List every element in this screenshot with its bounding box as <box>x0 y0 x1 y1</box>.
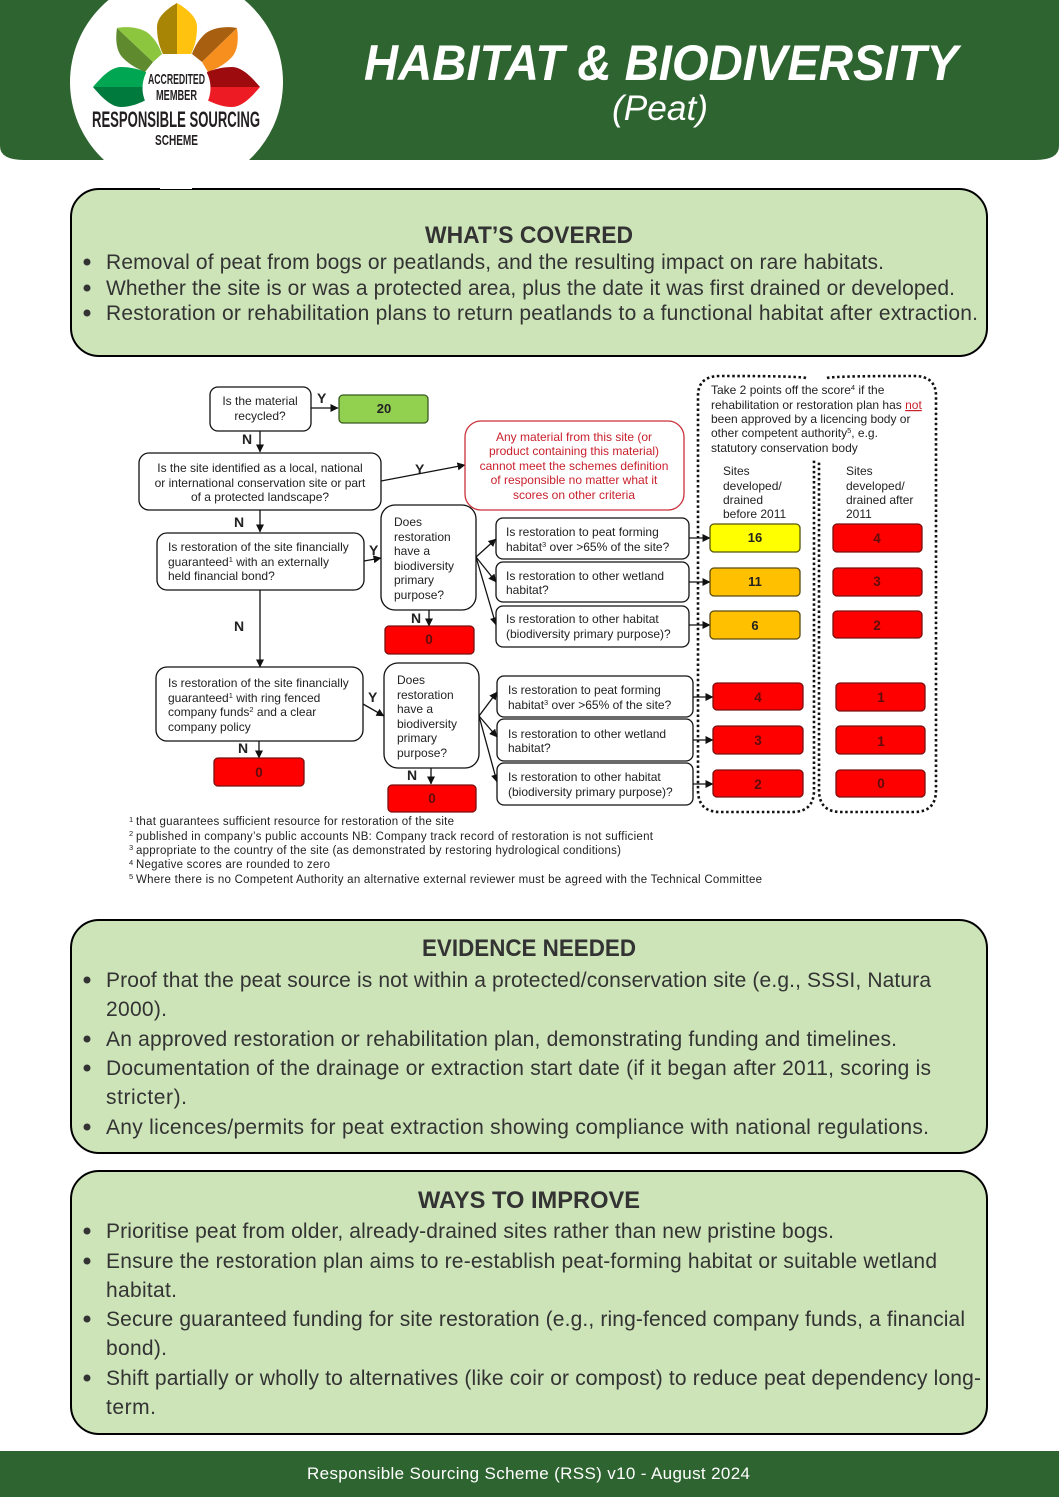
question: ring fenced funds: 2 <box>249 705 254 714</box>
question: financial bond: Is restoration of the site financially <box>168 540 349 554</box>
arrows: to scores, upper <box>689 538 710 625</box>
question: biodiversity purpose 1: have a <box>394 544 430 558</box>
score: 4 <box>713 683 803 710</box>
arrow: conservation yes: Y <box>415 461 425 477</box>
question: conservation site: Is the site identified as a local, national <box>157 461 363 475</box>
question: other habitat 1: Is restoration to other habitat <box>506 612 659 626</box>
note: take 2 points off: , e.g. <box>851 426 878 440</box>
score: 0: 0 <box>255 765 263 780</box>
question: peat forming 1: over >65% of the site? <box>546 540 670 554</box>
heading: what's covered: WHAT’S COVERED <box>425 222 633 249</box>
question: other habitat 1 <box>496 606 689 647</box>
arrow: funds no <box>238 740 259 758</box>
question: other habitat 2: (biodiversity primary purpose)? <box>508 785 673 799</box>
question: peat forming 2: Is restoration to peat forming <box>508 683 661 697</box>
note: take 2 points off: rehabilitation or restoration plan has not <box>711 398 922 412</box>
question: biodiversity purpose 2 <box>384 663 479 768</box>
question: biodiversity purpose 1: primary <box>394 573 434 587</box>
bullet list: ways to improve: habitat. <box>106 1279 177 1302</box>
question: biodiversity purpose 2: have a <box>397 702 433 716</box>
column heading: before 2011: drained <box>723 493 763 507</box>
score: 3: 3 <box>873 574 881 589</box>
arrow: biodiversity 1 no: N <box>411 610 421 626</box>
footnotes: 1 <box>129 815 133 824</box>
score: 4 <box>833 524 922 552</box>
arrow: recycled no: N <box>242 431 252 447</box>
arrow: conservation yes <box>381 461 465 481</box>
score: 1: 1 <box>877 734 885 749</box>
bullet list: evidence needed: An approved restoration or rehabilitation plan, demonstrating funding and timelines. <box>106 1028 897 1051</box>
arrow: funds yes <box>363 689 384 716</box>
score: 1 <box>836 726 925 754</box>
footnotes: 2 <box>129 829 133 838</box>
arrow: recycled yes <box>311 390 338 408</box>
question: peat forming 2: 3 <box>544 698 548 707</box>
arrow: recycled yes: Y <box>317 390 327 406</box>
question: financial bond: with an externally <box>233 555 329 569</box>
question: biodiversity purpose 2: restoration <box>397 688 454 702</box>
footnotes: published in company’s public accounts NB: Company track record of restoration is not sufficient <box>136 831 654 843</box>
question: ring fenced funds: and a clear <box>254 705 316 719</box>
bullet list: ways to improve: Prioritise peat from older, already-drained sites rather than new pristine bogs. <box>106 1220 834 1243</box>
question: biodiversity purpose 2: primary <box>397 731 437 745</box>
question: other habitat 1: (biodiversity primary purpose)? <box>506 627 671 641</box>
score: 20 <box>339 395 428 423</box>
arrow: bond yes <box>364 542 381 561</box>
footnotes: Where there is no Competent Authority an alternative external reviewer must be agreed with the Technical Committee <box>136 874 762 886</box>
logo: accredited member: ACCREDITED <box>148 71 205 88</box>
bullet list: ways to improve: Secure guaranteed funding for site restoration (e.g., ring-fenced company funds, a financial <box>106 1308 965 1331</box>
score: 0: 0 <box>428 791 436 806</box>
column heading: before 2011: Sites <box>723 464 750 478</box>
score: 0 <box>214 758 304 786</box>
column heading: after 2011: drained after <box>846 493 913 507</box>
bullet list: evidence needed: Documentation of the drainage or extraction start date (if it began after 2011, scoring is <box>106 1057 931 1080</box>
connector: bond no <box>234 590 260 667</box>
question: biodiversity purpose 1 <box>381 505 476 610</box>
score: 4: 4 <box>873 531 881 546</box>
bullet list: evidence needed <box>84 969 931 1139</box>
note: take 2 points off: Take 2 points off the score <box>711 383 851 397</box>
bullet list: evidence needed: Proof that the peat source is not within a protected/conservation site (e.g., SSSI, Natura <box>106 969 931 992</box>
score: 0 <box>388 785 476 812</box>
note: take 2 points off: 4 <box>851 383 855 392</box>
score: 2: 2 <box>754 777 762 792</box>
question: biodiversity purpose 2: Does <box>397 673 425 687</box>
note: take 2 points off: 5 <box>847 426 851 435</box>
question: conservation site <box>139 453 381 510</box>
score: 3 <box>833 568 922 596</box>
connector: bond no: N <box>234 618 244 634</box>
question: recycled: recycled? <box>234 409 286 423</box>
score: 4: 4 <box>754 690 762 705</box>
callout: cannot be responsible: cannot meet the schemes definition <box>480 459 668 473</box>
question: ring fenced funds: company funds <box>168 705 249 719</box>
question: biodiversity purpose 1: purpose? <box>394 588 444 602</box>
score: 3 <box>713 726 803 754</box>
question: biodiversity purpose 2: biodiversity <box>397 717 457 731</box>
note: take 2 points off <box>711 383 922 455</box>
footnotes: Negative scores are rounded to zero <box>136 859 330 871</box>
score: 0 <box>836 770 925 797</box>
question: conservation site: or international conservation site or part <box>155 476 366 490</box>
question: biodiversity purpose 2: purpose? <box>397 746 447 760</box>
question: ring fenced funds <box>156 667 363 741</box>
callout: cannot be responsible: scores on other criteria <box>513 488 635 502</box>
footnotes: 5 <box>129 872 133 881</box>
logo: accredited member <box>70 0 283 160</box>
question: conservation site: of a protected landscape? <box>191 490 329 504</box>
question: other habitat 2: Is restoration to other habitat <box>508 770 661 784</box>
arrows: biodiversity 2 branches <box>479 692 497 782</box>
question: financial bond <box>157 533 364 590</box>
panel: evidence needed <box>71 920 987 1153</box>
score: 1 <box>836 683 925 711</box>
score: 0: 0 <box>425 632 433 647</box>
arrow: biodiversity 2 no <box>407 767 431 784</box>
column heading: before 2011: before 2011 <box>723 507 786 521</box>
column heading: after 2011: Sites <box>846 464 873 478</box>
score: 0: 0 <box>877 776 885 791</box>
bullet list: what's covered: Whether the site is or was a protected area, plus the date it was first drained or developed. <box>106 277 955 300</box>
arrow: bond yes: Y <box>369 542 379 558</box>
question: wetland 1: habitat? <box>506 583 549 597</box>
footnotes: appropriate to the country of the site (as demonstrated by restoring hydrological conditions) <box>136 845 621 857</box>
bullet list: evidence needed: stricter). <box>106 1086 187 1109</box>
question: ring fenced funds: with ring fenced <box>233 691 320 705</box>
arrow: biodiversity 2 no: N <box>407 767 417 783</box>
arrow: recycled no <box>242 431 260 452</box>
question: biodiversity purpose 1: Does <box>394 515 422 529</box>
score: 16 <box>710 524 800 552</box>
column heading: after 2011: 2011 <box>846 507 872 521</box>
title: HABITAT & BIODIVERSITY <box>364 35 962 91</box>
question: peat forming 2 <box>497 676 693 717</box>
score: 3: 3 <box>754 733 762 748</box>
callout: cannot be responsible: of responsible no matter what it <box>491 473 658 487</box>
footnotes: 4 <box>129 858 133 867</box>
score: 2: 2 <box>873 618 881 633</box>
question: peat forming 1: Is restoration to peat forming <box>506 525 659 539</box>
footnotes: that guarantees sufficient resource for restoration of the site <box>136 816 454 828</box>
question: wetland 2: Is restoration to other wetland <box>508 727 666 741</box>
logo: accredited member: RESPONSIBLE SOURCING <box>92 107 260 132</box>
question: peat forming 2: habitat <box>508 698 544 712</box>
question: ring fenced funds: Is restoration of the site financially <box>168 676 349 690</box>
question: other habitat 2 <box>497 763 693 805</box>
score: 16: 16 <box>748 530 762 545</box>
bullet list: ways to improve: Ensure the restoration plan aims to re-establish peat-forming habitat or suitable wetland <box>106 1250 937 1273</box>
panel: ways to improve <box>71 1171 987 1434</box>
panel: what's covered <box>71 188 987 356</box>
flowchart: peat scoring <box>129 376 936 886</box>
column heading: after 2011: developed/ <box>846 479 905 493</box>
question: recycled <box>210 387 311 431</box>
footer: Responsible Sourcing Scheme (RSS) v10 - August 2024 <box>307 1464 750 1483</box>
dotted score columns <box>698 376 936 812</box>
note: take 2 points off: been approved by a licencing body or <box>711 412 910 426</box>
bullet list: what's covered <box>84 251 978 325</box>
footer <box>0 1451 1059 1497</box>
question: biodiversity purpose 1: biodiversity <box>394 559 454 573</box>
question: wetland 1: Is restoration to other wetland <box>506 569 664 583</box>
footnotes: 3 <box>129 843 133 852</box>
bullet list: evidence needed: Any licences/permits for peat extraction showing compliance with national regulations. <box>106 1116 929 1139</box>
score: 2 <box>833 611 922 638</box>
arrows: to scores, lower <box>693 697 713 784</box>
score: 2 <box>713 770 803 797</box>
arrows: biodiversity 1 branches <box>476 539 496 625</box>
question: financial bond: held financial bond? <box>168 569 275 583</box>
score: 0 <box>385 626 474 654</box>
header banner <box>0 0 1059 160</box>
score: 20: 20 <box>377 401 391 416</box>
callout: cannot be responsible: Any material from this site (or <box>496 430 652 444</box>
bullet list: what's covered: Removal of peat from bogs or peatlands, and the resulting impact on rare habitats. <box>106 251 884 274</box>
note: take 2 points off: statutory conservation body <box>711 441 858 455</box>
arrow: funds no: N <box>238 740 248 756</box>
column heading: after 2011 <box>846 464 913 521</box>
arrow: biodiversity 1 no <box>411 610 429 626</box>
question: peat forming 1 <box>496 518 689 559</box>
score: 1: 1 <box>877 690 885 705</box>
heading: ways to improve: WAYS TO IMPROVE <box>418 1187 640 1214</box>
question: wetland 1 <box>496 562 689 602</box>
bullet list: ways to improve: term. <box>106 1396 156 1419</box>
question: ring fenced funds: company policy <box>168 720 251 734</box>
question: wetland 2: habitat? <box>508 741 551 755</box>
question: ring fenced funds: guaranteed <box>168 691 229 705</box>
arrow: funds yes: Y <box>368 689 378 705</box>
bullet list: what's covered: Restoration or rehabilitation plans to return peatlands to a functional habitat after extraction. <box>106 302 978 325</box>
score: 11 <box>710 568 800 596</box>
logo: accredited member: MEMBER <box>156 87 197 104</box>
bullet list: ways to improve <box>84 1220 981 1419</box>
question: biodiversity purpose 1: restoration <box>394 530 451 544</box>
bullet list: evidence needed: 2000). <box>106 998 167 1021</box>
arrow: conservation no <box>234 510 260 532</box>
callout: cannot be responsible <box>465 421 684 510</box>
question: peat forming 2: over >65% of the site? <box>548 698 672 712</box>
heading: evidence needed: EVIDENCE NEEDED <box>422 935 636 962</box>
column heading: before 2011 <box>723 464 786 521</box>
question: ring fenced funds: 1 <box>229 691 233 700</box>
score: 6 <box>710 611 800 639</box>
bullet list: ways to improve: Shift partially or wholly to alternatives (like coir or compost) to reduce peat dependency long- <box>106 1367 981 1390</box>
question: recycled: Is the material <box>222 394 298 408</box>
question: financial bond: guaranteed <box>168 555 229 569</box>
score: 6: 6 <box>751 618 759 633</box>
question: financial bond: 1 <box>229 555 233 564</box>
bullet list: ways to improve: bond). <box>106 1337 167 1360</box>
question: wetland 2 <box>497 719 693 761</box>
question: peat forming 1: 3 <box>542 540 546 549</box>
arrow: conservation no: N <box>234 514 244 530</box>
note: take 2 points off: other competent authority <box>711 426 847 440</box>
score: 11: 11 <box>748 574 762 589</box>
question: peat forming 1: habitat <box>506 540 542 554</box>
callout: cannot be responsible: product containing this material) <box>489 444 659 458</box>
logo: accredited member: SCHEME <box>155 132 198 149</box>
column heading: before 2011: developed/ <box>723 479 782 493</box>
note: take 2 points off: if the <box>855 383 885 397</box>
subtitle: (Peat) <box>612 89 708 128</box>
footnotes <box>129 815 762 886</box>
